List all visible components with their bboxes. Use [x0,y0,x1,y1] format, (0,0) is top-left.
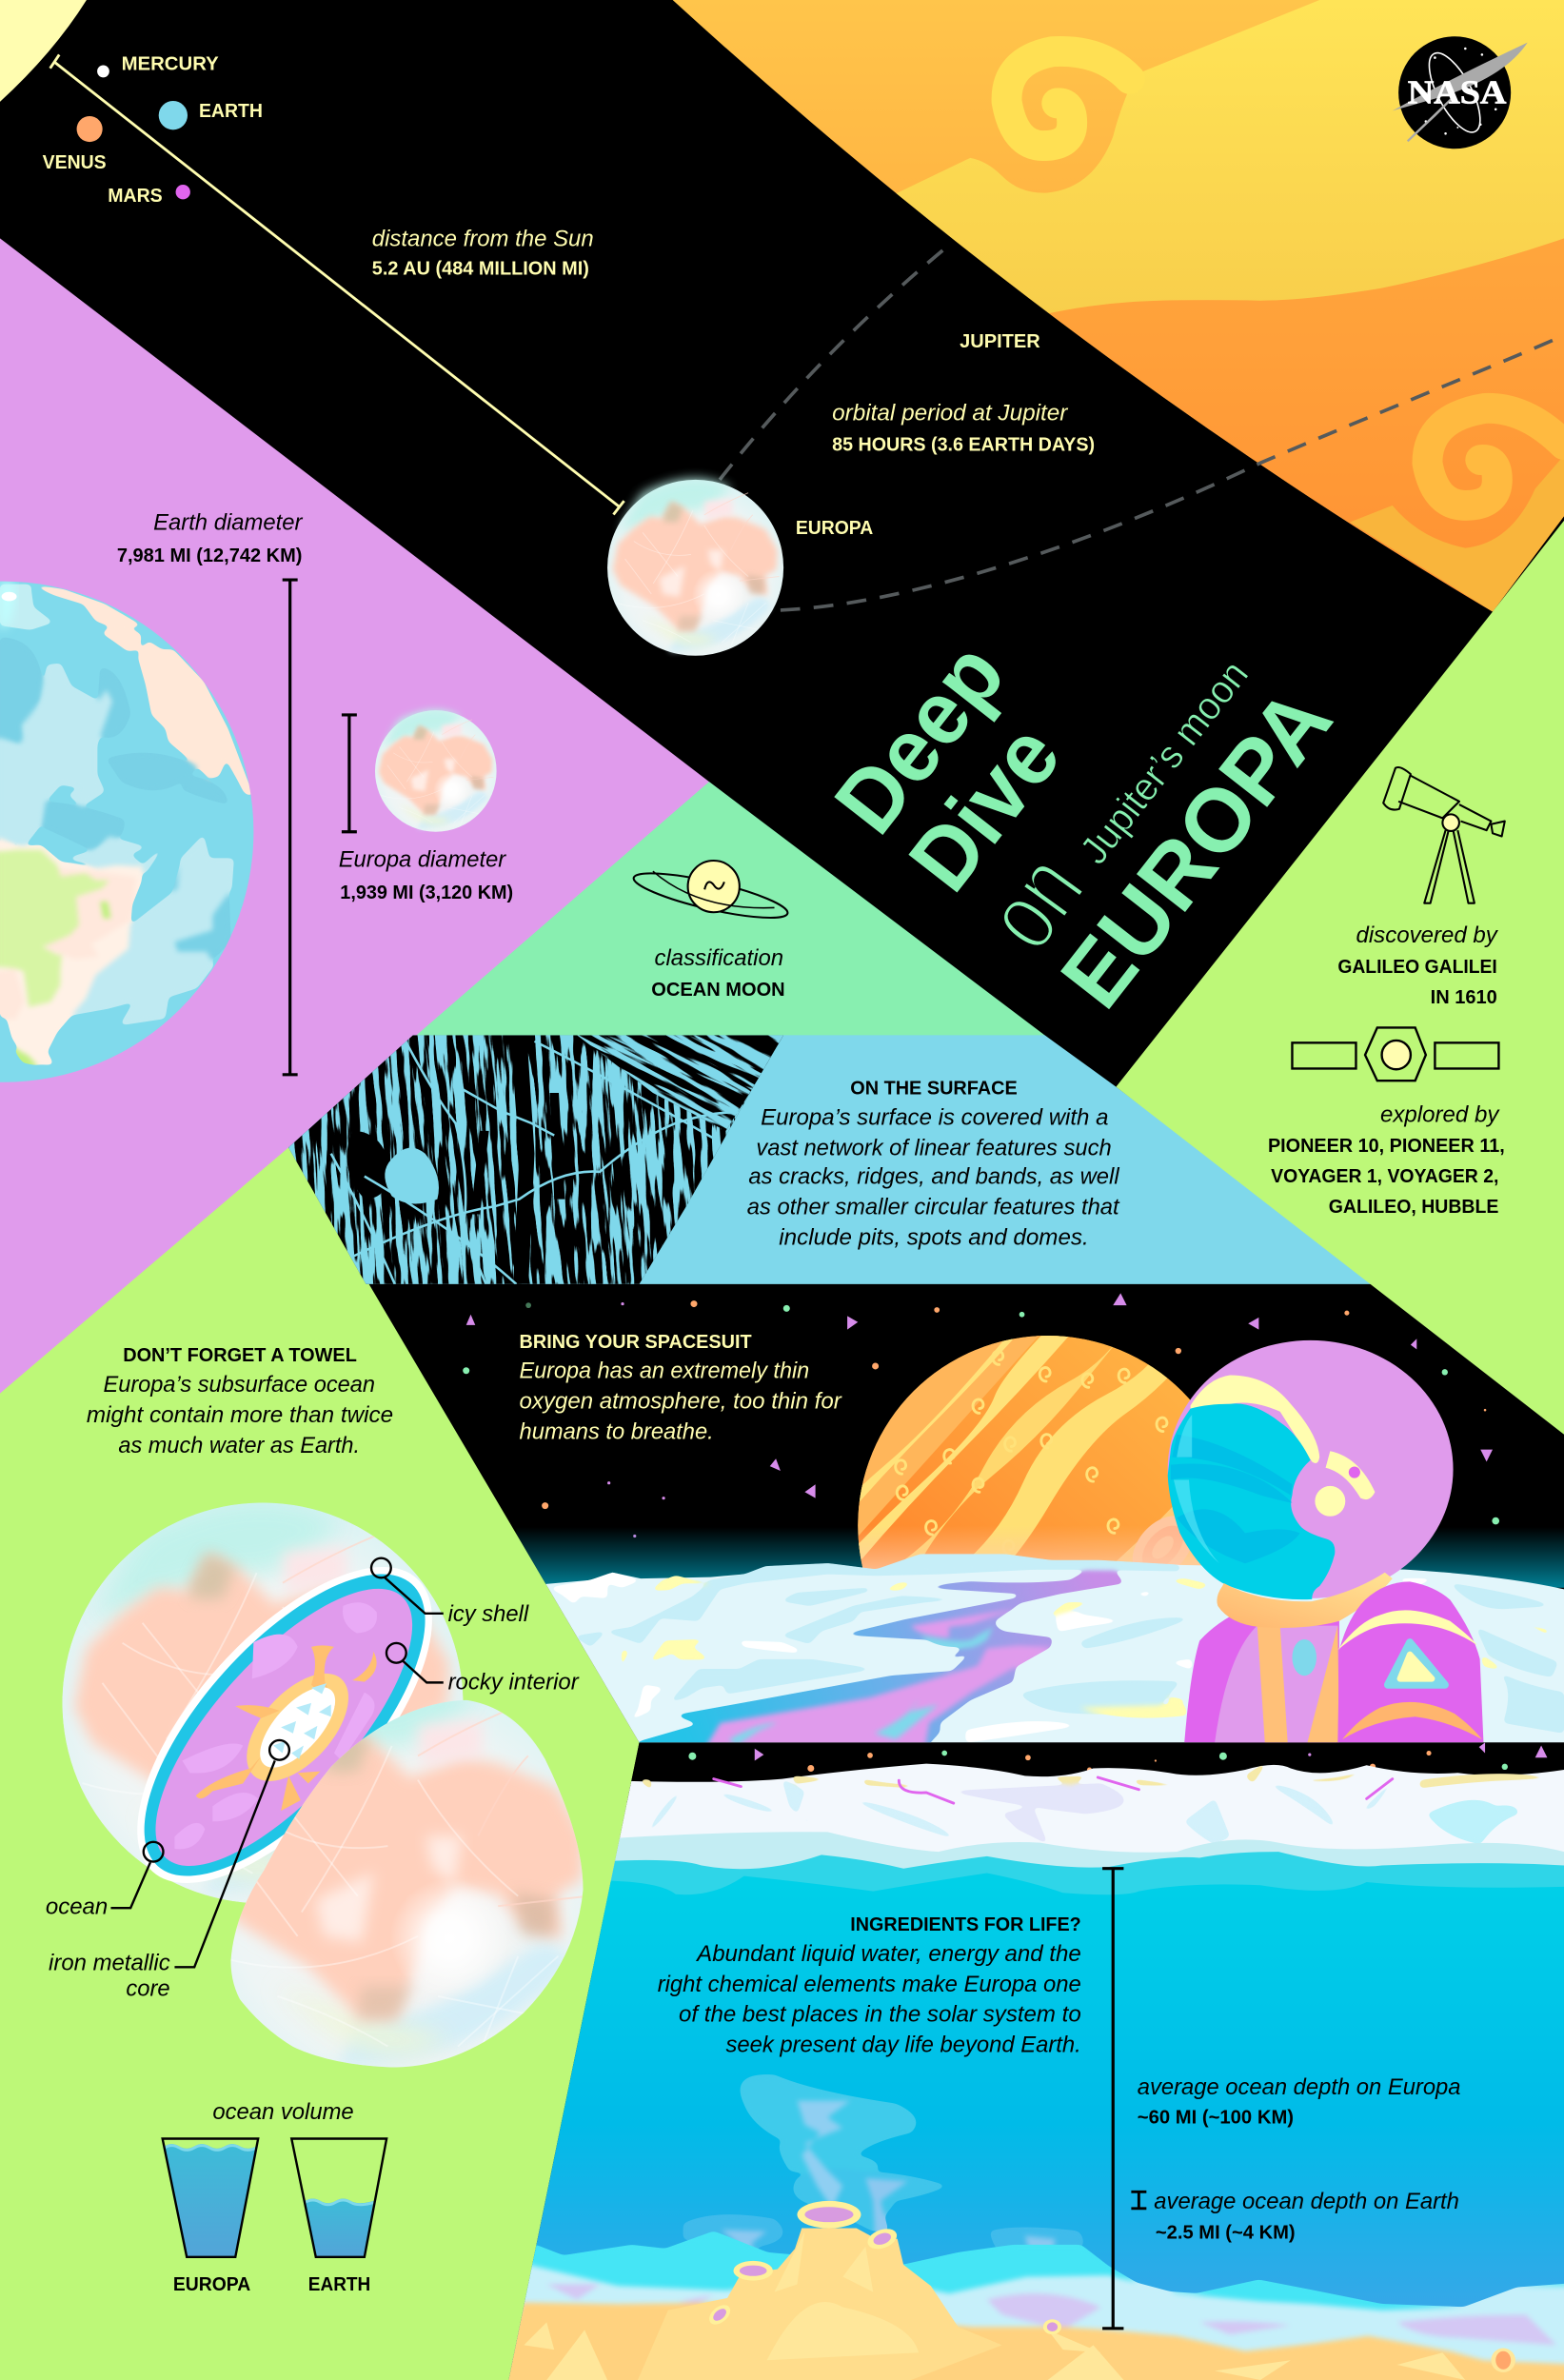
cup: Europa [163,2138,258,2257]
explored by text: explored by [1380,1101,1500,1127]
towel text: DON’T FORGET A TOWEL [123,1345,357,1366]
title: on [964,835,1105,969]
horizon haze [516,1527,1564,1588]
classification label [651,945,785,1001]
cutaway labels: iron metallic [49,1951,170,1976]
ingredients for life text: Abundant liquid water, energy and the [695,1941,1081,1967]
on the surface text: Europa’s surface is covered with a [761,1104,1108,1130]
discovered by text [1337,922,1499,1008]
spacesuit text: Europa has an extremely thin [520,1359,809,1384]
astronaut helmet [1168,1340,1454,1599]
Europa diameter bar [342,715,357,832]
Europa cutaway: upper half [62,1500,464,1903]
distance from the Sun line [50,54,624,514]
explored by text: VOYAGER 1, VOYAGER 2, [1271,1166,1498,1187]
ingredients for life text [658,1914,1081,2058]
spacesuit text: humans to breathe. [520,1418,714,1444]
ingredients for life text: right chemical elements make Europa one [658,1972,1081,1997]
Earth diameter bar [283,580,298,1075]
Europa diameter label [339,846,513,903]
distance text: distance from the Sun [372,226,594,251]
hydrothermal plumes [683,2074,1083,2249]
planet labels [43,53,263,207]
ocean depth text [1138,2074,1461,2244]
ocean volume label: ocean volume [212,2099,354,2125]
planet labels: MARS [108,186,163,207]
Earth diameter label: 7,981 MI (12,742 KM) [117,545,302,566]
cutaway labels [46,1601,580,2002]
title: Jupiter’s moon [1071,652,1257,872]
Earth diameter label [117,509,303,566]
spacesuit text: oxygen atmosphere, too thin for [520,1389,842,1415]
cutaway labels: ocean [46,1894,108,1920]
icon: telescope [1383,767,1505,903]
orbital period text: JUPITER [960,331,1040,352]
explored by text: GALILEO, HUBBLE [1329,1197,1498,1218]
discovered by text: discovered by [1356,922,1499,948]
panel: purple size comparison [0,238,729,1488]
ingredients for life text: seek present day life beyond Earth. [725,2033,1081,2058]
title: Deep [816,625,1023,851]
icon: spacecraft [1292,1027,1498,1081]
discovered by text: IN 1610 [1431,987,1497,1008]
towel text [87,1345,393,1458]
Europa diameter label: Europa diameter [339,846,506,872]
small Europa globe [375,709,497,832]
towel text: as much water as Earth. [118,1433,360,1458]
Earth depth bar [1131,2192,1146,2209]
Earth diameter label: Earth diameter [153,509,303,535]
classification label: OCEAN MOON [651,980,785,1001]
ingredients for life text: of the best places in the solar system to [679,2002,1081,2028]
ocean depth text: ~2.5 MI (~4 KM) [1156,2223,1296,2244]
ocean depth text: average ocean depth on Europa [1138,2074,1461,2100]
Earth globe [0,577,258,1093]
on the surface text: as other smaller circular features that [747,1195,1120,1220]
orbit path of Europa (dashed) [720,248,1564,610]
orbital period text: 85 HOURS (3.6 EARTH DAYS) [832,435,1095,456]
panel: right lime discovery [1116,521,1564,1435]
icon: ocean moon [630,861,791,926]
cup labels: EARTH [308,2274,370,2295]
inner planets [77,66,190,199]
cutaway labels: core [126,1976,170,2002]
cutaway labels: rocky interior [448,1670,580,1696]
classification label: classification [655,945,783,971]
sun corner [0,0,87,102]
ice melt band [546,1832,1564,1913]
planet labels: EARTH [199,101,263,122]
astronaut backpack [1337,1581,1483,1742]
planet labels: VENUS [43,152,107,173]
panel: Jupiter surface [668,0,1564,623]
panel: subsurface ocean [493,1742,1564,2380]
distance text [372,226,594,280]
on the surface text: as cracks, ridges, and bands, as well [748,1164,1119,1190]
Europa globe [607,479,783,656]
ingredients for life text: INGREDIENTS FOR LIFE? [850,1914,1081,1935]
Europa diameter label: 1,939 MI (3,120 KM) [340,883,513,903]
ice surface [539,1555,1564,1746]
stars band [626,1742,1548,1803]
spacesuit text: BRING YOUR SPACESUIT [520,1332,752,1353]
ocean depth text: ~60 MI (~100 KM) [1138,2108,1294,2129]
panel: left lime ocean volume [0,1147,640,2380]
on the surface text: vast network of linear features such [756,1135,1112,1160]
cup: Earth [291,2138,386,2257]
cup labels [173,2274,370,2295]
ocean upper band [546,1852,1564,1973]
Jupiter [858,1336,1201,1569]
NASA logo [1393,36,1528,149]
discovered by text: GALILEO GALILEI [1337,957,1497,978]
Europa cutaway: lower half [197,1673,598,2076]
panel: spacesuit scene [463,1293,1564,1742]
panel: classification [403,782,1060,1047]
Europa cutaway: interior [88,1519,483,1931]
surface crack texture [288,1035,783,1284]
Europa depth bar [1102,1869,1123,2329]
explored by text: PIONEER 10, PIONEER 11, [1268,1136,1505,1157]
planet labels: MERCURY [122,53,219,74]
orbital period text: orbital period at Jupiter [832,401,1068,426]
ocean water [501,1873,1564,2380]
NASA logo: NASA [1408,73,1507,110]
title: Dive [890,706,1079,909]
stars [463,1293,1499,1537]
on the surface text: include pits, spots and domes. [779,1224,1089,1250]
cutaway labels: icy shell [448,1601,529,1627]
ice shell layer [562,1764,1564,1882]
on the surface text: ON THE SURFACE [850,1079,1018,1100]
astronaut suit [1184,1573,1393,1742]
sea floor layers [493,2231,1564,2380]
towel text: might contain more than twice [87,1402,393,1428]
title [816,625,1351,1025]
river [630,1571,1123,1749]
orbital period text: EUROPA [796,518,873,539]
explored by text [1268,1101,1505,1218]
spacesuit text [520,1332,842,1444]
distance text: 5.2 AU (484 MILLION MI) [372,259,589,280]
cup labels: EUROPA [173,2274,250,2295]
volcano [524,2229,1465,2380]
cutaway markers and leaders [110,1558,444,1967]
panel: surface blue [288,1035,1376,1284]
on the surface text [747,1079,1120,1250]
orbital period text [796,331,1095,539]
towel text: Europa’s subsurface ocean [103,1372,375,1398]
title: EUROPA [1041,670,1351,1025]
ocean depth text: average ocean depth on Earth [1154,2189,1459,2214]
